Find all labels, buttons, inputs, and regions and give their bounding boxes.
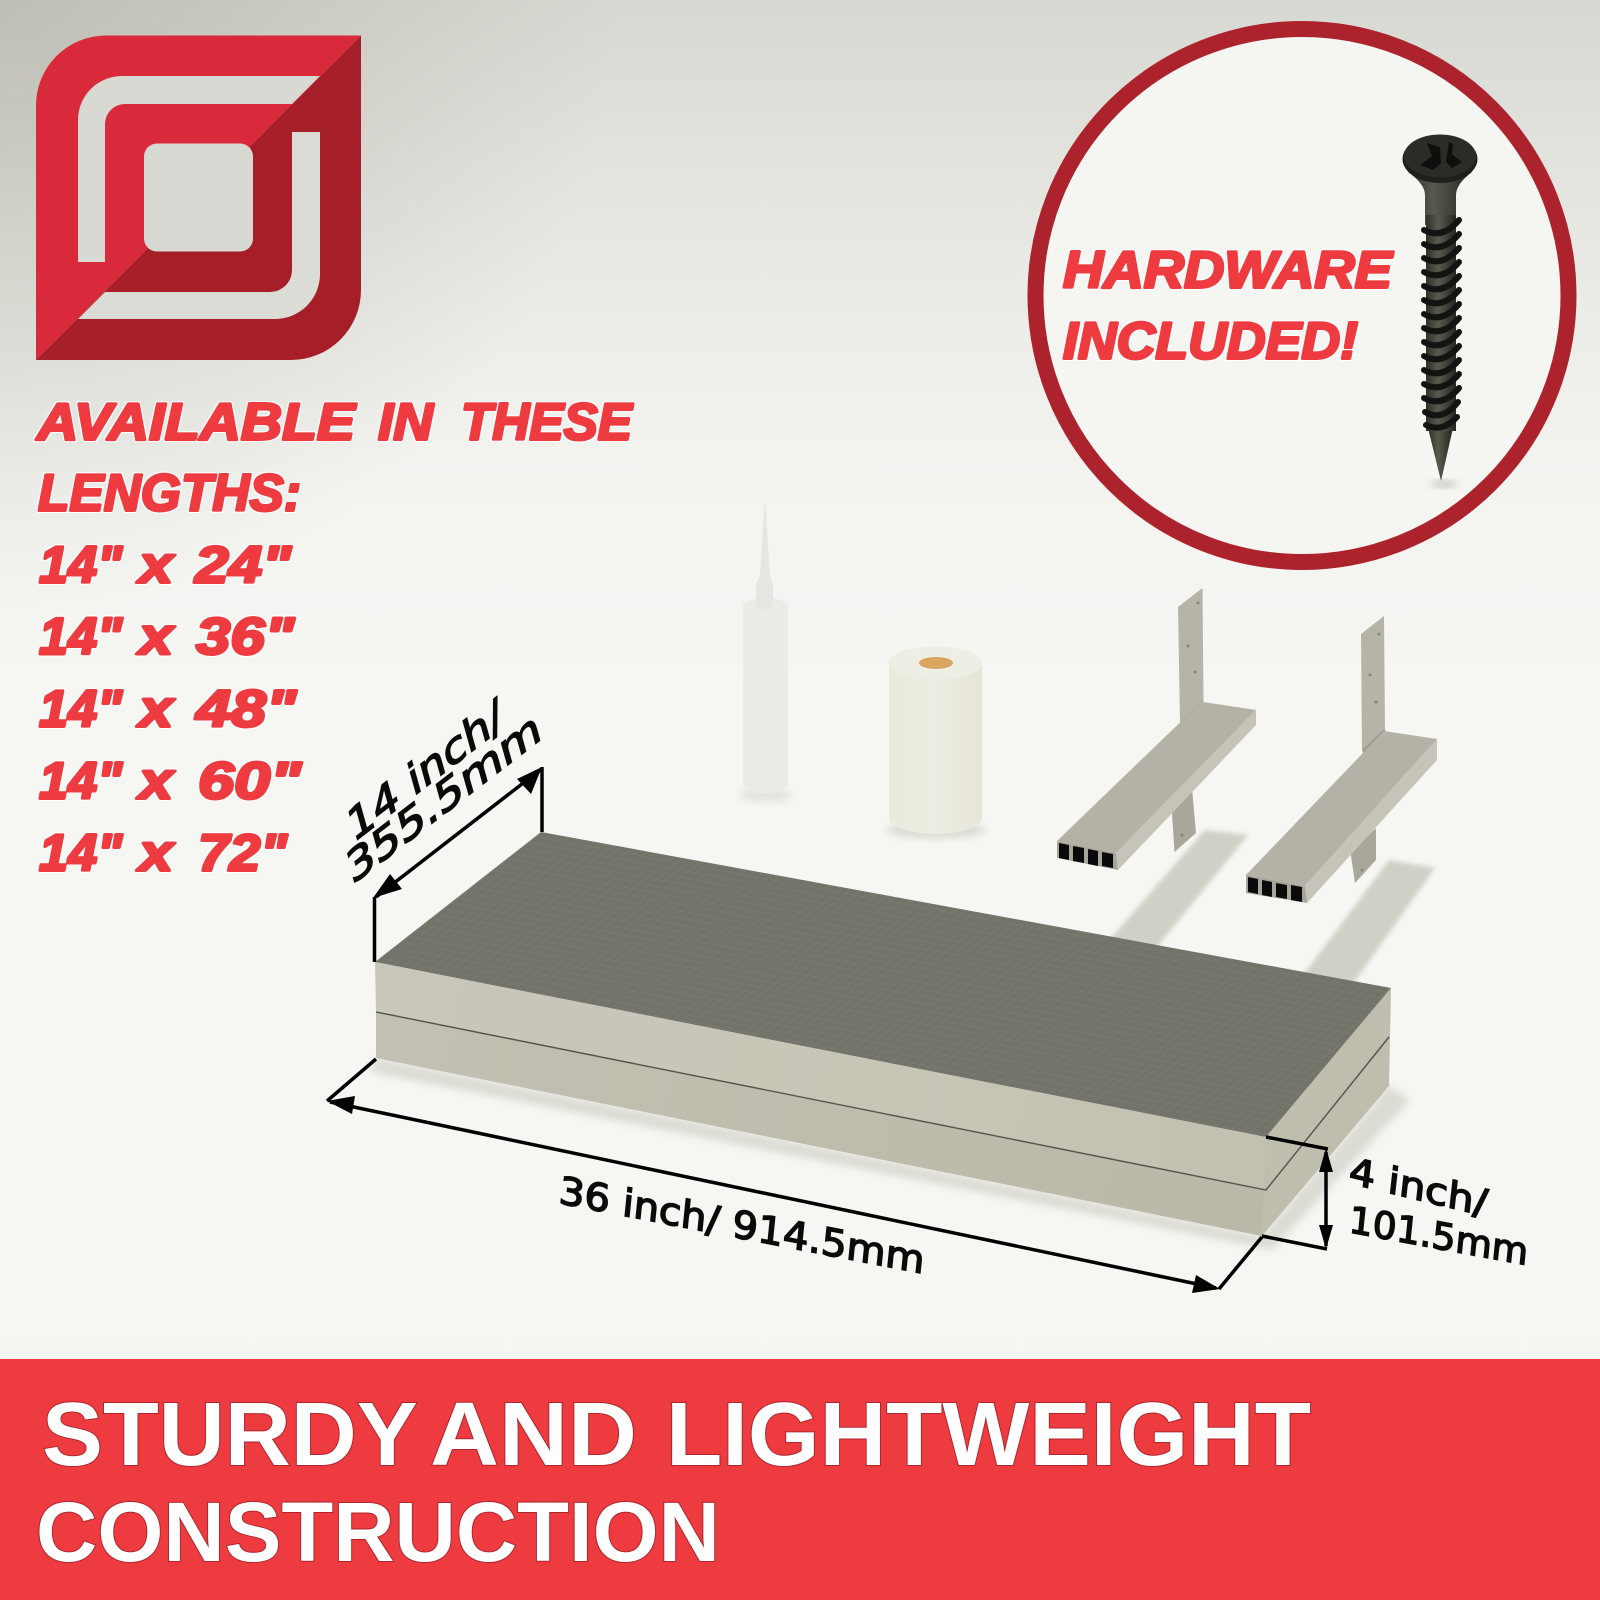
- dimension: height: [1262, 1137, 1530, 1274]
- size list item: x: [135, 752, 175, 810]
- logo light band: top left: [78, 76, 320, 262]
- label: width 14 inch: 14 inch/: [342, 688, 509, 853]
- bracket shadows: [1105, 830, 1435, 995]
- bracket left: [1057, 588, 1256, 870]
- bracket end cells: [1059, 843, 1113, 868]
- banner title line 2: CONSTRUCTION: [36, 1485, 720, 1579]
- hardware circle callout: [1036, 29, 1568, 562]
- logo: [36, 36, 361, 360]
- size list item: x: [135, 608, 175, 666]
- heading line 1: THESE: [461, 394, 633, 452]
- size list item: 14": [39, 752, 123, 810]
- callout text: INCLUDED!: [1063, 312, 1358, 370]
- size list item: 14": [39, 680, 123, 738]
- callout text: HARDWARE: [1063, 242, 1393, 300]
- banner title line 1: AND: [430, 1385, 637, 1485]
- icon: screw: [1402, 134, 1478, 488]
- heading line 1: IN: [378, 394, 435, 452]
- size list item: 36": [196, 608, 296, 666]
- icon: sealant tube: [740, 497, 792, 802]
- heading line 1: AVAILABLE: [35, 394, 356, 452]
- bracket right: [1246, 616, 1437, 903]
- label: width 355.5mm: 355.5mm: [341, 700, 546, 895]
- size list item: 14": [39, 536, 123, 594]
- label: length: 36 inch/ 914.5mm: [557, 1168, 927, 1283]
- logo center square: [144, 144, 253, 252]
- dimension: length: [327, 1059, 1262, 1293]
- label: height 4 inch: 4 inch/: [1347, 1149, 1490, 1225]
- size list item: 72": [198, 824, 288, 882]
- icon: roll: [886, 646, 986, 838]
- logo light band: bottom right: [78, 132, 320, 319]
- callout text: [1063, 242, 1393, 370]
- dimension: width: [341, 688, 546, 962]
- size list item: x: [135, 824, 175, 882]
- label: height 101.5mm: 101.5mm: [1347, 1198, 1530, 1274]
- size list item: 24": [194, 536, 293, 594]
- bracket end cells: [1248, 877, 1302, 902]
- banner title line 1: LIGHTWEIGHT: [666, 1385, 1311, 1485]
- shelf top face: [375, 832, 1391, 1137]
- heading line 2: LENGTHS:: [38, 464, 301, 522]
- size list item: 60": [198, 752, 303, 810]
- size list item: x: [135, 680, 175, 738]
- shelf right side: [1262, 988, 1391, 1236]
- banner title line 1: STURDY: [42, 1385, 417, 1485]
- shelf front lower layer: [376, 1012, 1266, 1236]
- size list item: 48": [195, 680, 298, 738]
- size list item: 14": [39, 824, 123, 882]
- shelf front upper layer: [375, 962, 1266, 1190]
- heading: available lengths: [35, 394, 633, 882]
- bottom banner: [0, 1359, 1600, 1600]
- shelf board: [370, 832, 1410, 1250]
- size list item: 14": [39, 608, 123, 666]
- size list item: x: [135, 536, 175, 594]
